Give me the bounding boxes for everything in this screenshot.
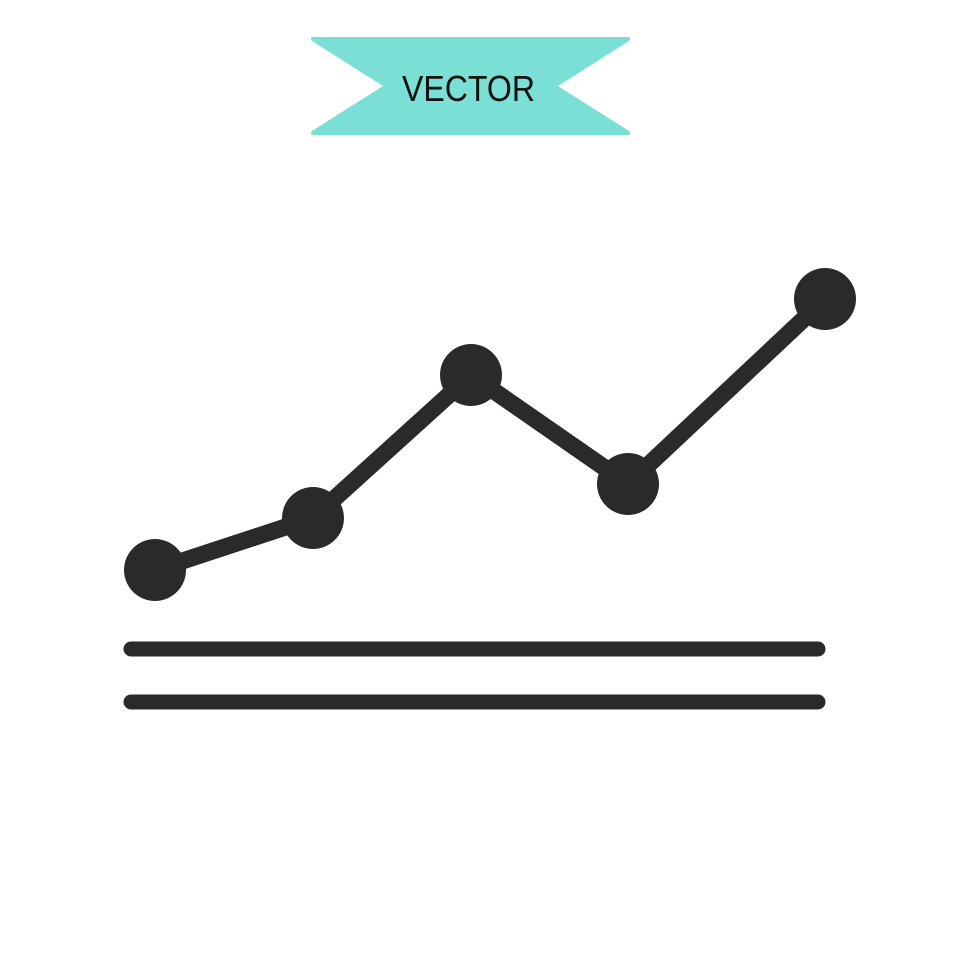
- line chart icon: [124, 268, 856, 601]
- banner: VECTOR: VECTOR: [402, 68, 535, 109]
- banner: VECTOR: [311, 37, 630, 135]
- baseline rules: [131, 649, 818, 702]
